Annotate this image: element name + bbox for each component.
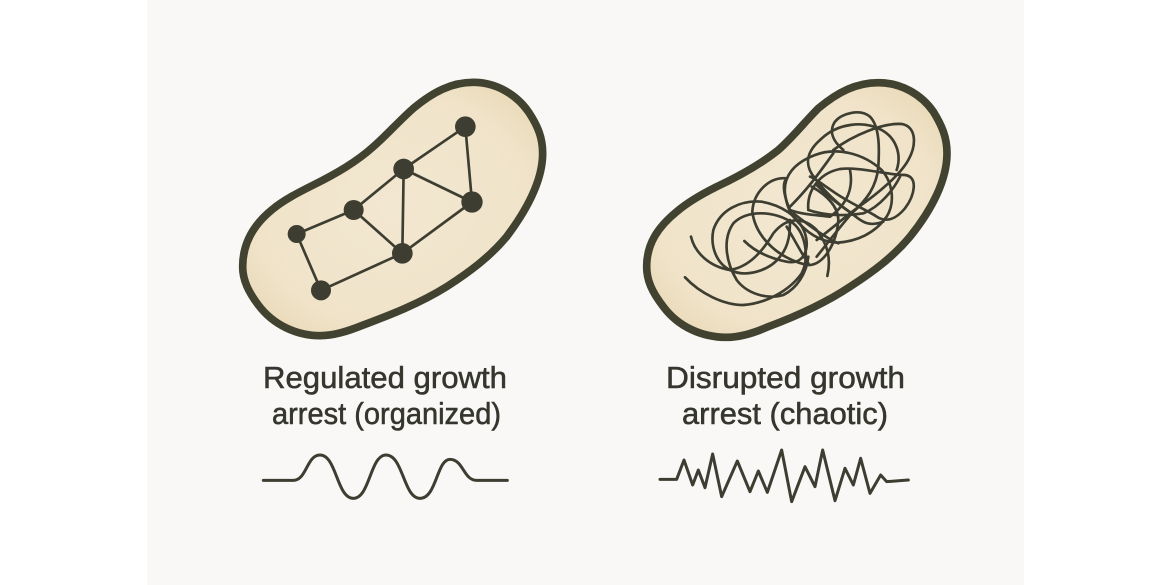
label: disrupted growth arrest: arrest (chaotic) [682,396,888,431]
network edges [297,127,472,290]
panel: disrupted cell with chaotic tangle [647,83,947,337]
label: disrupted growth arrest [666,360,905,431]
label: disrupted growth arrest: Disrupted growth [666,360,905,395]
panel: regulated cell with organized network [243,82,543,336]
label: regulated growth arrest: arrest (organized) [272,396,501,431]
tangled strands [685,112,914,305]
label: regulated growth arrest: Regulated growth [263,360,507,395]
network nodes [288,116,483,300]
cell body [647,83,947,337]
background panel [147,0,1024,585]
waveform: disrupted erratic oscillation [660,450,908,502]
cell body [243,82,543,336]
label: regulated growth arrest [263,360,507,431]
waveform: regulated smooth oscillation [263,455,507,498]
